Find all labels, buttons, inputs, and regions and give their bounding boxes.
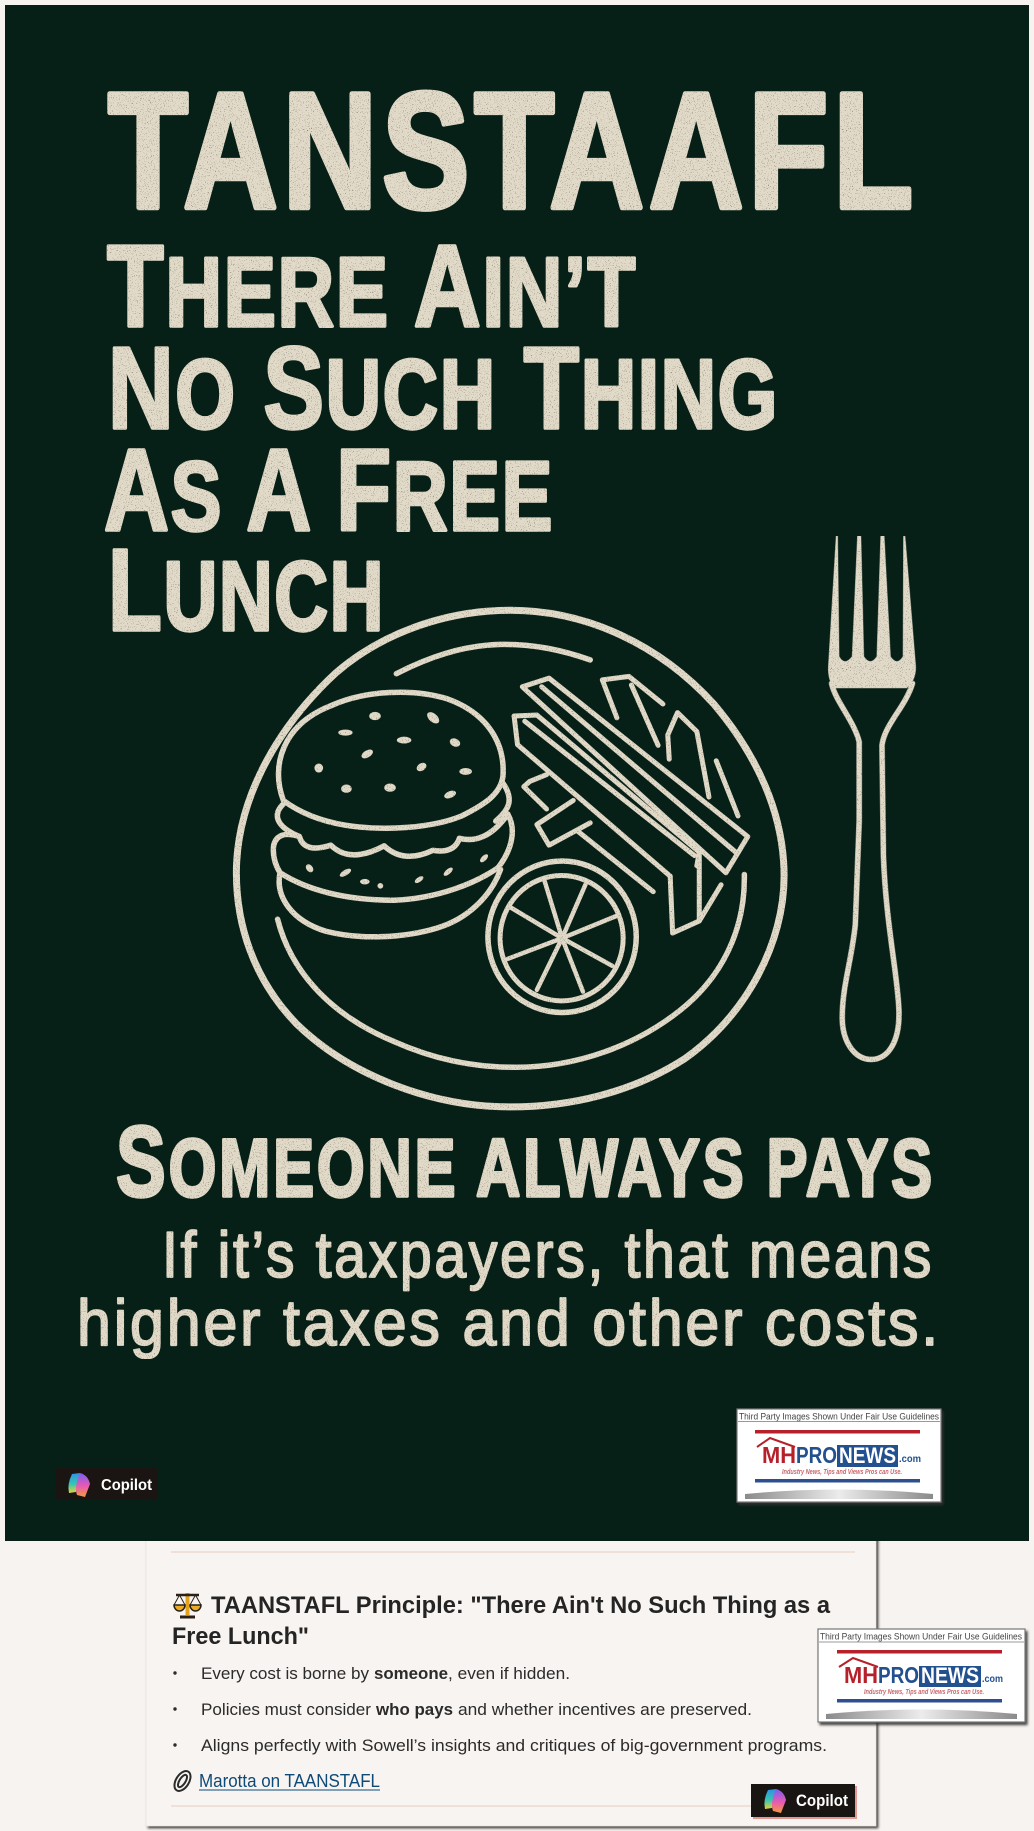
logo: MHProNews watermark 2: Third Party Images Shown Under Fair Use Guidelines [820, 1632, 1023, 1642]
heading: TAANSTAFL principle: TAANSTAFL Principle: "There Ain't No Such Thing as a [211, 1592, 831, 1619]
heading: There Ain't No Such Thing As A Free Lunch: AS A FREE [104, 425, 554, 555]
fries [514, 676, 748, 933]
logo: MHProNews watermark 2: NEWS [921, 1663, 979, 1688]
icon: plate with burger, fries and lemon [236, 610, 784, 1107]
badge: Copilot: Copilot [101, 1477, 153, 1494]
logo: MHProNews watermark 2: Industry News, Tips and Views Pros can Use. [864, 1689, 984, 1696]
heading: There Ain't No Such Thing As A Free Lunch: NO SUCH THING [108, 323, 779, 453]
bullet list: someone [374, 1664, 448, 1683]
logo: MHProNews watermark: Industry News, Tips and Views Pros can Use. [782, 1469, 902, 1476]
badge: Copilot 2: Copilot [796, 1791, 848, 1810]
logo: MHProNews watermark: NEWS [839, 1443, 896, 1468]
bullet list: Every cost is borne by [201, 1664, 369, 1683]
heading: There Ain't No Such Thing As A Free Lunch [104, 221, 779, 655]
logo: MHProNews watermark 2 [818, 1629, 1025, 1722]
icon: fork [828, 536, 916, 1059]
plate inner ring [278, 644, 744, 1067]
heading: There Ain't No Such Thing As A Free Lunch: LUNCH [108, 525, 385, 655]
link: Marotta on TAANSTAFL: Marotta on TAANSTAFL [199, 1771, 380, 1791]
icon: balance scales [174, 1593, 201, 1617]
logo: MHProNews watermark 2: PRO [878, 1662, 919, 1688]
heading: TAANSTAFL principle [172, 1592, 831, 1650]
logo: MHProNews watermark: .com [899, 1454, 921, 1465]
logo: MHProNews watermark: PRO [796, 1442, 837, 1468]
icon: paperclip [171, 1768, 194, 1794]
logo: MHProNews watermark: Third Party Images Shown Under Fair Use Guidelines [739, 1412, 940, 1422]
bullet list: and whether incentives are preserved. [458, 1700, 752, 1719]
bullet list: Aligns perfectly with Sowell’s insights and critiques of big-government programs. [201, 1736, 827, 1755]
plate rim [236, 610, 784, 1107]
badge: Copilot 2 [751, 1784, 857, 1819]
logo: MHProNews watermark 2: MH [844, 1662, 878, 1688]
text: taxpayers line [77, 1218, 941, 1359]
badge: Copilot [56, 1468, 158, 1500]
lemon slice [488, 861, 636, 1013]
text: taxpayers line: If it’s taxpayers, that means [162, 1218, 934, 1291]
poster artwork [77, 58, 941, 1359]
bullet list: Policies must consider [201, 1700, 371, 1719]
text: taxpayers line: higher taxes and other costs. [77, 1286, 941, 1359]
panel: article card [146, 1535, 876, 1826]
bullet list: , even if hidden. [448, 1664, 570, 1683]
heading: TAANSTAFL principle: Free Lunch" [172, 1623, 309, 1650]
burger [273, 692, 512, 937]
logo: MHProNews watermark [737, 1409, 941, 1502]
logo: MHProNews watermark 2: .com [982, 1674, 1003, 1685]
heading: There Ain't No Such Thing As A Free Lunch: THERE AIN’T [107, 221, 637, 351]
bullet list [173, 1664, 827, 1755]
bullet list: who pays [375, 1700, 453, 1719]
logo: MHProNews watermark: MH [762, 1442, 796, 1468]
